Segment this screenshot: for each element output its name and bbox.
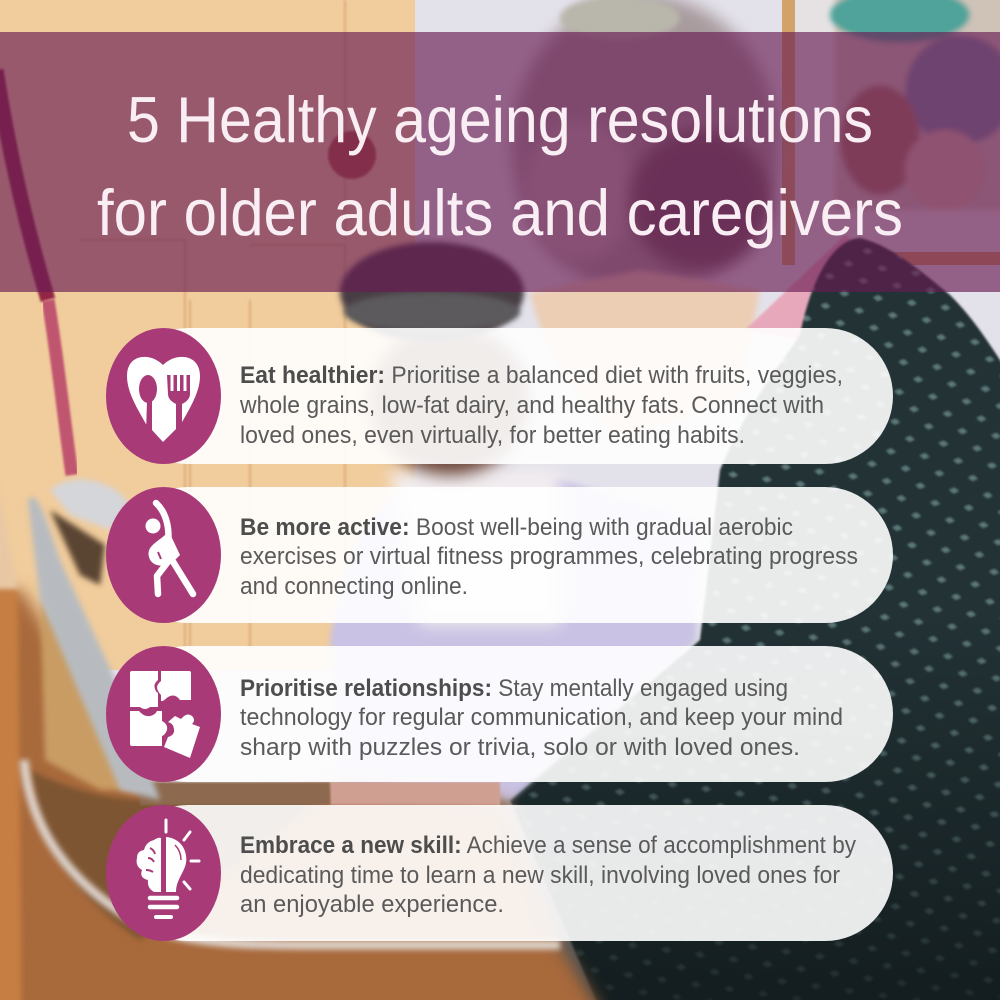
- text: whole grains, low-fat dairy, and healthy fats. Connect with: [239, 392, 824, 419]
- dark plant: [50, 510, 105, 585]
- door knob: [328, 131, 376, 179]
- text: [239, 362, 843, 449]
- title band: [0, 32, 1000, 292]
- text: sharp with puzzles or trivia, solo or with loved ones.: [240, 734, 800, 761]
- card background: [120, 646, 893, 782]
- text: and connecting online.: [240, 573, 468, 600]
- title: [97, 83, 903, 249]
- text: Be more active: Boost well-being with gradual aerobic: [240, 514, 793, 541]
- left edge: [0, 590, 22, 1000]
- woman's top: [330, 480, 700, 800]
- laptop: [28, 497, 160, 800]
- woman's hair: [340, 242, 524, 342]
- grey hair curls: [344, 292, 520, 332]
- card background: [120, 487, 893, 623]
- panel: be more active: [106, 487, 893, 623]
- title: for older adults and caregivers: [97, 176, 903, 249]
- text: technology for regular communication, and keep your mind: [240, 704, 843, 731]
- pale left edge: [0, 470, 18, 590]
- cord tassel: [48, 300, 72, 475]
- icon: brain light bulb: [106, 805, 221, 941]
- picture frame: [782, 0, 1000, 265]
- icon: stretching figure: [106, 487, 221, 623]
- text: [240, 832, 857, 918]
- panel: prioritise relationships: [106, 646, 893, 782]
- text: dedicating time to learn a new skill, involving loved ones for: [240, 862, 840, 889]
- door: [0, 0, 415, 670]
- laptop lid: [50, 480, 130, 530]
- text: Prioritise relationships: Stay mentally engaged using: [240, 675, 788, 702]
- door panels: [80, 0, 345, 660]
- text: an enjoyable experience.: [240, 891, 504, 918]
- older person's sweater: [510, 238, 1000, 1000]
- older person's hair and face: [512, 0, 880, 440]
- sweater shadow: [500, 300, 1000, 1000]
- icon: heart with spoon and fork: [106, 328, 221, 464]
- text: Eat healthier: Prioritise a balanced diet with fruits, veggies,: [240, 362, 843, 389]
- table and chair: [0, 470, 625, 1000]
- woman's face: [370, 325, 530, 475]
- panel: embrace a new skill: [106, 805, 893, 941]
- strip above pill four: [140, 782, 330, 805]
- chair rim: [24, 760, 560, 945]
- text: Embrace a new skill: Achieve a sense of accomplishment by: [240, 832, 857, 859]
- chair seat: [0, 590, 625, 1000]
- text: exercises or virtual fitness programmes, celebrating progress: [240, 543, 858, 570]
- text: [240, 514, 858, 600]
- brown shadow: [30, 770, 330, 940]
- white shirt: [390, 470, 560, 625]
- table tan: [40, 600, 140, 790]
- text: loved ones, even virtually, for better eating habits.: [240, 422, 745, 449]
- title: 5 Healthy ageing resolutions: [127, 83, 873, 156]
- card background: [120, 328, 893, 464]
- curtain cord: [0, 70, 48, 300]
- icon: puzzle pieces: [106, 646, 221, 782]
- painting: [830, 0, 1000, 210]
- panel: eat healthier: [106, 328, 893, 464]
- card background: [120, 805, 893, 941]
- hand: [330, 782, 500, 805]
- text: [240, 675, 843, 761]
